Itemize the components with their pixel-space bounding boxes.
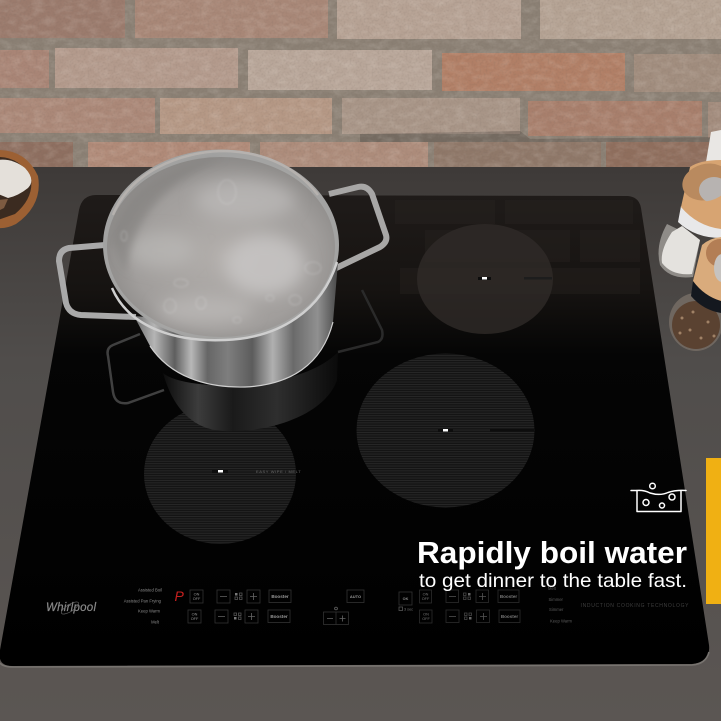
right control row 1: Booster <box>500 594 517 599</box>
pepper mill wood <box>693 237 721 301</box>
left control row 2: Booster <box>270 614 288 619</box>
Whirlpool logo: Whirlpool <box>46 602 96 614</box>
boiling water <box>107 157 335 337</box>
steam highlights <box>126 180 305 324</box>
mode labels left <box>124 588 162 624</box>
mode labels right: Simmer <box>548 597 564 602</box>
center controls: OK <box>403 597 409 601</box>
pot rim <box>103 150 339 340</box>
mode labels right <box>548 586 572 624</box>
pepper mill black band <box>691 281 721 313</box>
control panel <box>124 586 689 624</box>
mode labels left: Keep Warm <box>138 608 161 614</box>
right handle <box>329 187 386 270</box>
pot body <box>134 262 338 387</box>
mode labels left: Assisted Boil <box>138 588 162 592</box>
white sliver <box>706 130 721 162</box>
mode labels right: Keep Warm <box>550 618 572 624</box>
mode labels left: Assisted Pan Frying <box>124 598 162 604</box>
center controls: AUTO <box>350 594 361 599</box>
center controls <box>324 590 413 624</box>
burner: back right <box>417 224 553 334</box>
subheading: to get dinner to the table fast. <box>419 570 687 592</box>
right control row 2: ON <box>423 612 429 616</box>
bowl of garlic <box>0 150 39 228</box>
right control row 1: OFF <box>422 597 430 601</box>
salt jar <box>659 224 700 278</box>
cooktop bottom edge <box>0 652 709 667</box>
cooktop glass <box>0 195 709 666</box>
salt mill wood <box>681 160 721 229</box>
pot <box>59 150 386 387</box>
right control row 2: OFF <box>422 617 430 621</box>
left control row 1 <box>190 590 291 603</box>
mode labels left: Melt <box>151 620 160 624</box>
burner: front left <box>144 404 301 544</box>
countertop <box>0 167 721 721</box>
red P display: P <box>174 588 184 604</box>
bubbles <box>121 180 321 323</box>
left handle <box>59 245 136 317</box>
left control row 1: OFF <box>193 597 201 601</box>
left control row 2: ON <box>192 612 198 616</box>
heading: Rapidly boil water <box>417 536 687 570</box>
background: brick wall <box>0 0 721 170</box>
burner: front left: EASY WIPE / MELT <box>256 469 301 474</box>
left control row 2 <box>188 610 290 623</box>
salt and pepper mills <box>659 130 721 351</box>
right control row 2 <box>420 610 520 623</box>
dark water edge <box>112 158 225 275</box>
right control row 2: Booster <box>501 614 518 619</box>
center controls: 3 sec <box>404 608 413 612</box>
pepper jar <box>669 293 721 351</box>
induction label: INDUCTION COOKING TECHNOLOGY <box>580 603 689 609</box>
mode labels right: Simmer <box>549 607 564 612</box>
right control row 1: ON <box>423 592 429 596</box>
right control row 1 <box>420 590 519 603</box>
left control row 1: ON <box>194 592 200 596</box>
yellow accent bar <box>706 458 721 604</box>
burner: front large <box>356 354 534 508</box>
pot reflection <box>108 290 383 431</box>
left control row 2: OFF <box>191 617 199 621</box>
brick reflection in glass <box>395 200 640 294</box>
left control row 1: Booster <box>271 594 289 599</box>
icon: pot of boiling water <box>631 483 686 512</box>
white collar <box>678 206 721 238</box>
mode labels right: Melt <box>548 586 557 591</box>
